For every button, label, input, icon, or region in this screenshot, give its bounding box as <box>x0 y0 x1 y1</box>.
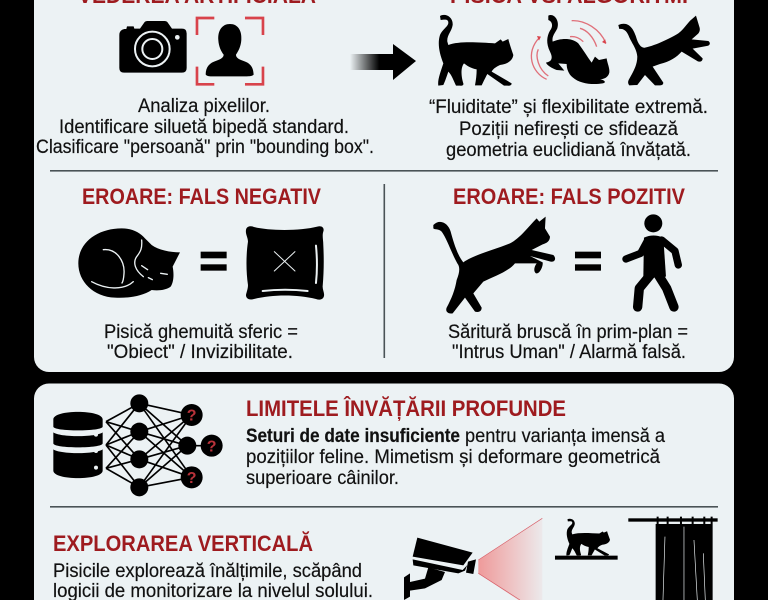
icon: person in bounding box <box>197 18 263 84</box>
text: false positive <box>448 322 688 363</box>
icon: curled cat <box>78 228 180 298</box>
text: false negative: "Obiect" / Invizibilitate. <box>107 342 293 363</box>
icon: equals sign <box>575 252 601 271</box>
heading: deep learning limits: LIMITELE ÎNVĂȚĂRII PROFUNDE <box>246 396 566 421</box>
text: cat physics <box>429 97 708 161</box>
heading: vertical exploration: EXPLORAREA VERTICALĂ <box>53 531 313 556</box>
text: artificial vision: Identificare siluetă bipedă standard. <box>59 117 349 138</box>
icon: curtain on rod <box>628 517 718 600</box>
text: cat physics: “Fluiditate” și flexibilitate extremă. <box>429 97 708 118</box>
text: false negative <box>104 322 298 363</box>
text: vertical exploration: Pisicile explorează înălțimile, scăpând <box>53 561 362 582</box>
text: false negative: Pisică ghemuită sferic = <box>104 322 298 343</box>
text: deep learning limits: pozițiilor feline. Mimetism și deformare geometrică <box>246 447 660 468</box>
icon: pillow <box>246 226 324 300</box>
text: deep learning limits: pentru varianța imensă a <box>465 426 665 447</box>
icon: cat on shelf <box>555 519 618 560</box>
text: artificial vision <box>36 96 374 158</box>
text: vertical exploration <box>53 561 373 600</box>
panel: computer vision vs cat physics <box>34 0 734 372</box>
icon: security camera with view cone <box>404 518 542 600</box>
icon: leaping cat <box>433 217 555 314</box>
text: deep learning limits <box>246 426 665 489</box>
icon: database and neural network: ? <box>207 438 217 455</box>
icon: database and neural network <box>53 394 223 496</box>
heading: false positive: EROARE: FALS POZITIV <box>453 184 685 209</box>
icon: camera <box>119 21 187 73</box>
text: false positive: "Intrus Uman" / Alarmă falsă. <box>452 342 686 363</box>
text: cat physics: geometria euclidiană învățată. <box>446 140 691 161</box>
icon: equals sign <box>201 252 227 271</box>
icon: database and neural network: ? <box>187 470 197 487</box>
text: artificial vision: Analiza pixelilor. <box>138 96 270 117</box>
heading: false negative: EROARE: FALS NEGATIV <box>82 184 321 209</box>
text: deep learning limits: Seturi de date insuficiente <box>246 426 460 447</box>
arrow <box>350 44 416 80</box>
icon: walking person <box>626 214 678 307</box>
text: cat physics: Poziții nefirești ce sfidează <box>459 119 678 140</box>
text: deep learning limits: superioare câinilor. <box>246 468 399 489</box>
panel: deep learning limits and vertical exploration <box>34 384 734 600</box>
text: false positive: Săritură bruscă în prim-plan = <box>448 322 688 343</box>
icon: database and neural network: ? <box>187 408 197 425</box>
text: artificial vision: Clasificare "persoană" prin "bounding box". <box>36 137 374 158</box>
icon: three cat poses <box>438 15 710 86</box>
